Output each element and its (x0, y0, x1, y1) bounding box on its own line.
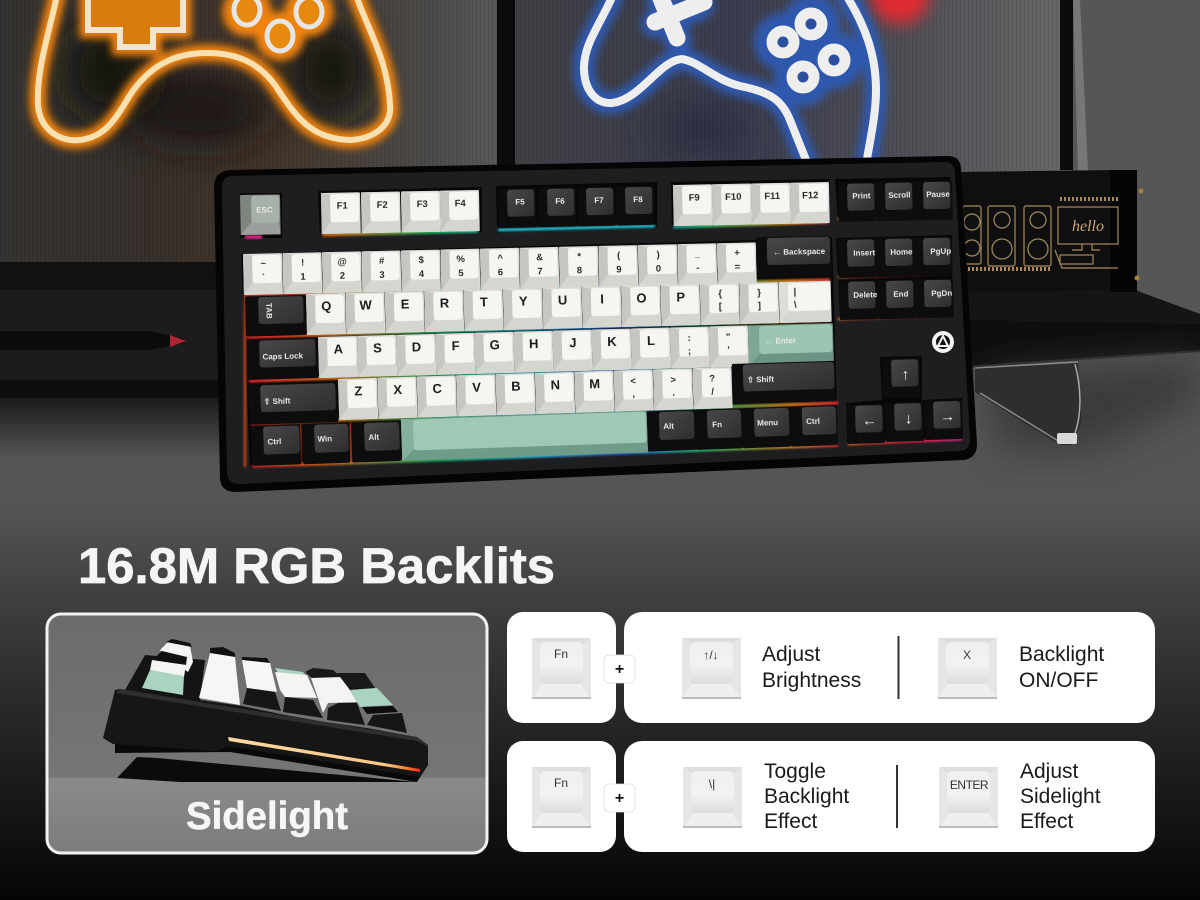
sidelight label: Sidelight (186, 795, 348, 838)
icon: blue controller glow (584, 0, 876, 165)
side view keyboard case (103, 689, 428, 782)
function row keys (240, 181, 953, 235)
panel: row 1 Fn key (507, 612, 616, 723)
modifier keys right: Ctrl (806, 417, 820, 426)
key: Caps Lock: Caps Lock (262, 351, 304, 362)
key: Enter (748, 323, 834, 366)
icon: backslash keycap (683, 767, 742, 828)
icon: arrows keycap: ↑/↓ (703, 648, 719, 662)
number row keys: `1234567890-= (262, 262, 741, 284)
F5-F8 keys (498, 186, 655, 228)
modifier keys left (251, 421, 401, 466)
QWERTY row keys (245, 281, 832, 337)
key: Backspace: ← Backspace (773, 247, 826, 257)
icon: brand logo badge (932, 331, 954, 353)
text: adjust sidelight effect: Sidelight (1020, 785, 1101, 808)
panel: row 2 Fn key (507, 741, 616, 852)
key: Backspace (756, 236, 832, 277)
mechanical keyboard (214, 156, 985, 498)
icon: stylus pen (0, 331, 184, 350)
wall panel: blue controller neon sign (497, 0, 1088, 268)
key: backslash: | (793, 287, 796, 298)
number row keys: ~!@#$%^&*()_+ (260, 248, 740, 270)
ZXCV row keys (248, 361, 836, 425)
F1-F4 keys: F4 (455, 198, 467, 209)
wall panel: orange controller neon sign (0, 0, 497, 268)
title: 16.8M RGB Backlits (78, 538, 555, 594)
key: left Shift: ⇧ Shift (264, 396, 291, 406)
QWERTY row keys: {} (718, 287, 761, 300)
print scroll pause keys: Scroll (888, 190, 911, 200)
icon: Enter keycap (939, 767, 998, 828)
F1-F4 keys: F2 (377, 200, 388, 211)
modifier keys right: Menu (757, 418, 778, 428)
F9-F12 keys: F12 (802, 190, 819, 202)
F5-F8 keys: F6 (555, 197, 565, 206)
side view keyboard plate (120, 655, 417, 738)
icon: Fn keycap: Fn (554, 647, 568, 661)
text: adjust sidelight effect: Effect (1020, 810, 1073, 833)
screen (1058, 207, 1118, 244)
icon: Enter keycap: ENTER (950, 778, 989, 792)
print scroll pause keys: Print (852, 191, 871, 201)
ZXCV row keys: <>? (630, 373, 715, 387)
arrow keys: ↓ (904, 410, 912, 427)
arrow keys (846, 358, 963, 444)
RGB underglow (245, 222, 838, 467)
bottom row keys (251, 404, 838, 466)
modifier keys left: Win (317, 434, 332, 444)
icon: backslash keycap: \| (709, 777, 715, 791)
icon: orange controller tube (38, 0, 390, 140)
desk shelf left with pen (0, 262, 250, 458)
F9-F12 keys: F11 (764, 191, 781, 202)
navigation cluster keys: PgUp (930, 247, 951, 256)
panel: sidelight photo (47, 614, 487, 853)
key: Caps Lock (247, 338, 318, 380)
key wells (240, 177, 962, 468)
navigation cluster keys: End (893, 290, 909, 299)
keyboard shadow (225, 456, 985, 498)
print scroll pause keys (838, 181, 953, 222)
plus badge row 1: + (615, 661, 624, 678)
key: space bar (401, 411, 648, 461)
F1-F4 keys: F3 (417, 199, 428, 210)
icon: X keycap (938, 638, 997, 699)
arrow keys: → (940, 408, 955, 426)
icon: X keycap: X (963, 648, 971, 662)
F9-F12 keys (673, 182, 830, 226)
side view keyboard keys (142, 639, 407, 733)
text: toggle backlight effect: Toggle (764, 760, 826, 783)
plus badge row 1 (604, 655, 635, 683)
text: toggle backlight effect: Backlight (764, 785, 849, 808)
acrylic stand (975, 362, 1082, 445)
ASDF row keys: :" (687, 332, 731, 344)
F5-F8 keys: F8 (633, 195, 643, 204)
key: Esc: ESC (256, 205, 273, 215)
arrow keys: ↑ (901, 366, 909, 384)
number row keys (243, 236, 832, 295)
F1-F4 keys: F1 (337, 200, 349, 212)
print scroll pause keys: Pause (926, 190, 950, 199)
keyboard case (214, 156, 977, 492)
key: Tab (245, 295, 306, 337)
icon: orange controller glow (38, 0, 390, 140)
text: adjust sidelight effect: Adjust (1020, 760, 1079, 783)
sidelight strip (228, 737, 420, 772)
text: toggle backlight effect: Effect (764, 810, 817, 833)
text: backlight on off: ON/OFF (1019, 669, 1098, 692)
F5-F8 keys: F7 (594, 196, 604, 205)
icon: arrows keycap (682, 638, 741, 699)
key: Esc (240, 194, 281, 235)
plus badge row 2 (604, 784, 635, 812)
F5-F8 keys: F5 (515, 197, 525, 207)
navigation cluster keys: Delete (853, 290, 878, 300)
arrow keys: ← (862, 412, 877, 430)
modifier keys right: Fn (712, 420, 722, 429)
icon: Fn keycap: Fn (554, 776, 568, 790)
navigation cluster keys: PgDn (931, 289, 952, 298)
ASDF row keys: ;' (688, 345, 730, 357)
QWERTY row keys: [] (719, 300, 761, 313)
modifier keys left: Ctrl (267, 437, 281, 446)
key: left Shift (248, 382, 338, 425)
F9-F12 keys: F9 (689, 192, 700, 204)
icon: blue controller tube (584, 0, 876, 165)
key: backslash: \ (794, 300, 797, 311)
text: adjust brightness: Adjust (762, 643, 821, 666)
key: right Shift (732, 361, 836, 404)
modifier keys left: Alt (368, 433, 380, 442)
key: right Shift: ⇧ Shift (747, 375, 774, 385)
text: backlight on off: Backlight (1019, 643, 1104, 666)
ZXCV row keys: ,./ (632, 387, 714, 400)
navigation cluster keys: Home (890, 247, 913, 257)
key: Tab: TAB (264, 303, 274, 319)
modifier keys right (647, 405, 838, 452)
decorative gold circuit device (960, 170, 1144, 292)
ASDF row keys (247, 323, 834, 380)
navigation cluster keys: Insert (853, 248, 876, 258)
desk shelf right (965, 290, 1200, 450)
panel: row 2 functions (624, 741, 1155, 852)
decorative gold circuit device: hello (1072, 218, 1104, 235)
panel: row 1 functions (624, 612, 1155, 723)
F9-F12 keys: F10 (725, 192, 742, 203)
plus badge row 2: + (615, 790, 624, 807)
key: Enter: ← Enter (765, 336, 796, 346)
navigation cluster keys (838, 237, 954, 320)
ASDF row keys: ASDFGHJKL (333, 333, 655, 357)
text: adjust brightness: Brightness (762, 669, 861, 692)
F1-F4 keys (321, 190, 480, 234)
key: backslash (779, 281, 832, 323)
ZXCV row keys: ZXCVBNM (354, 376, 600, 399)
QWERTY row keys: QWERTYUIOP (321, 289, 686, 314)
modifier keys right: Alt (663, 422, 674, 431)
